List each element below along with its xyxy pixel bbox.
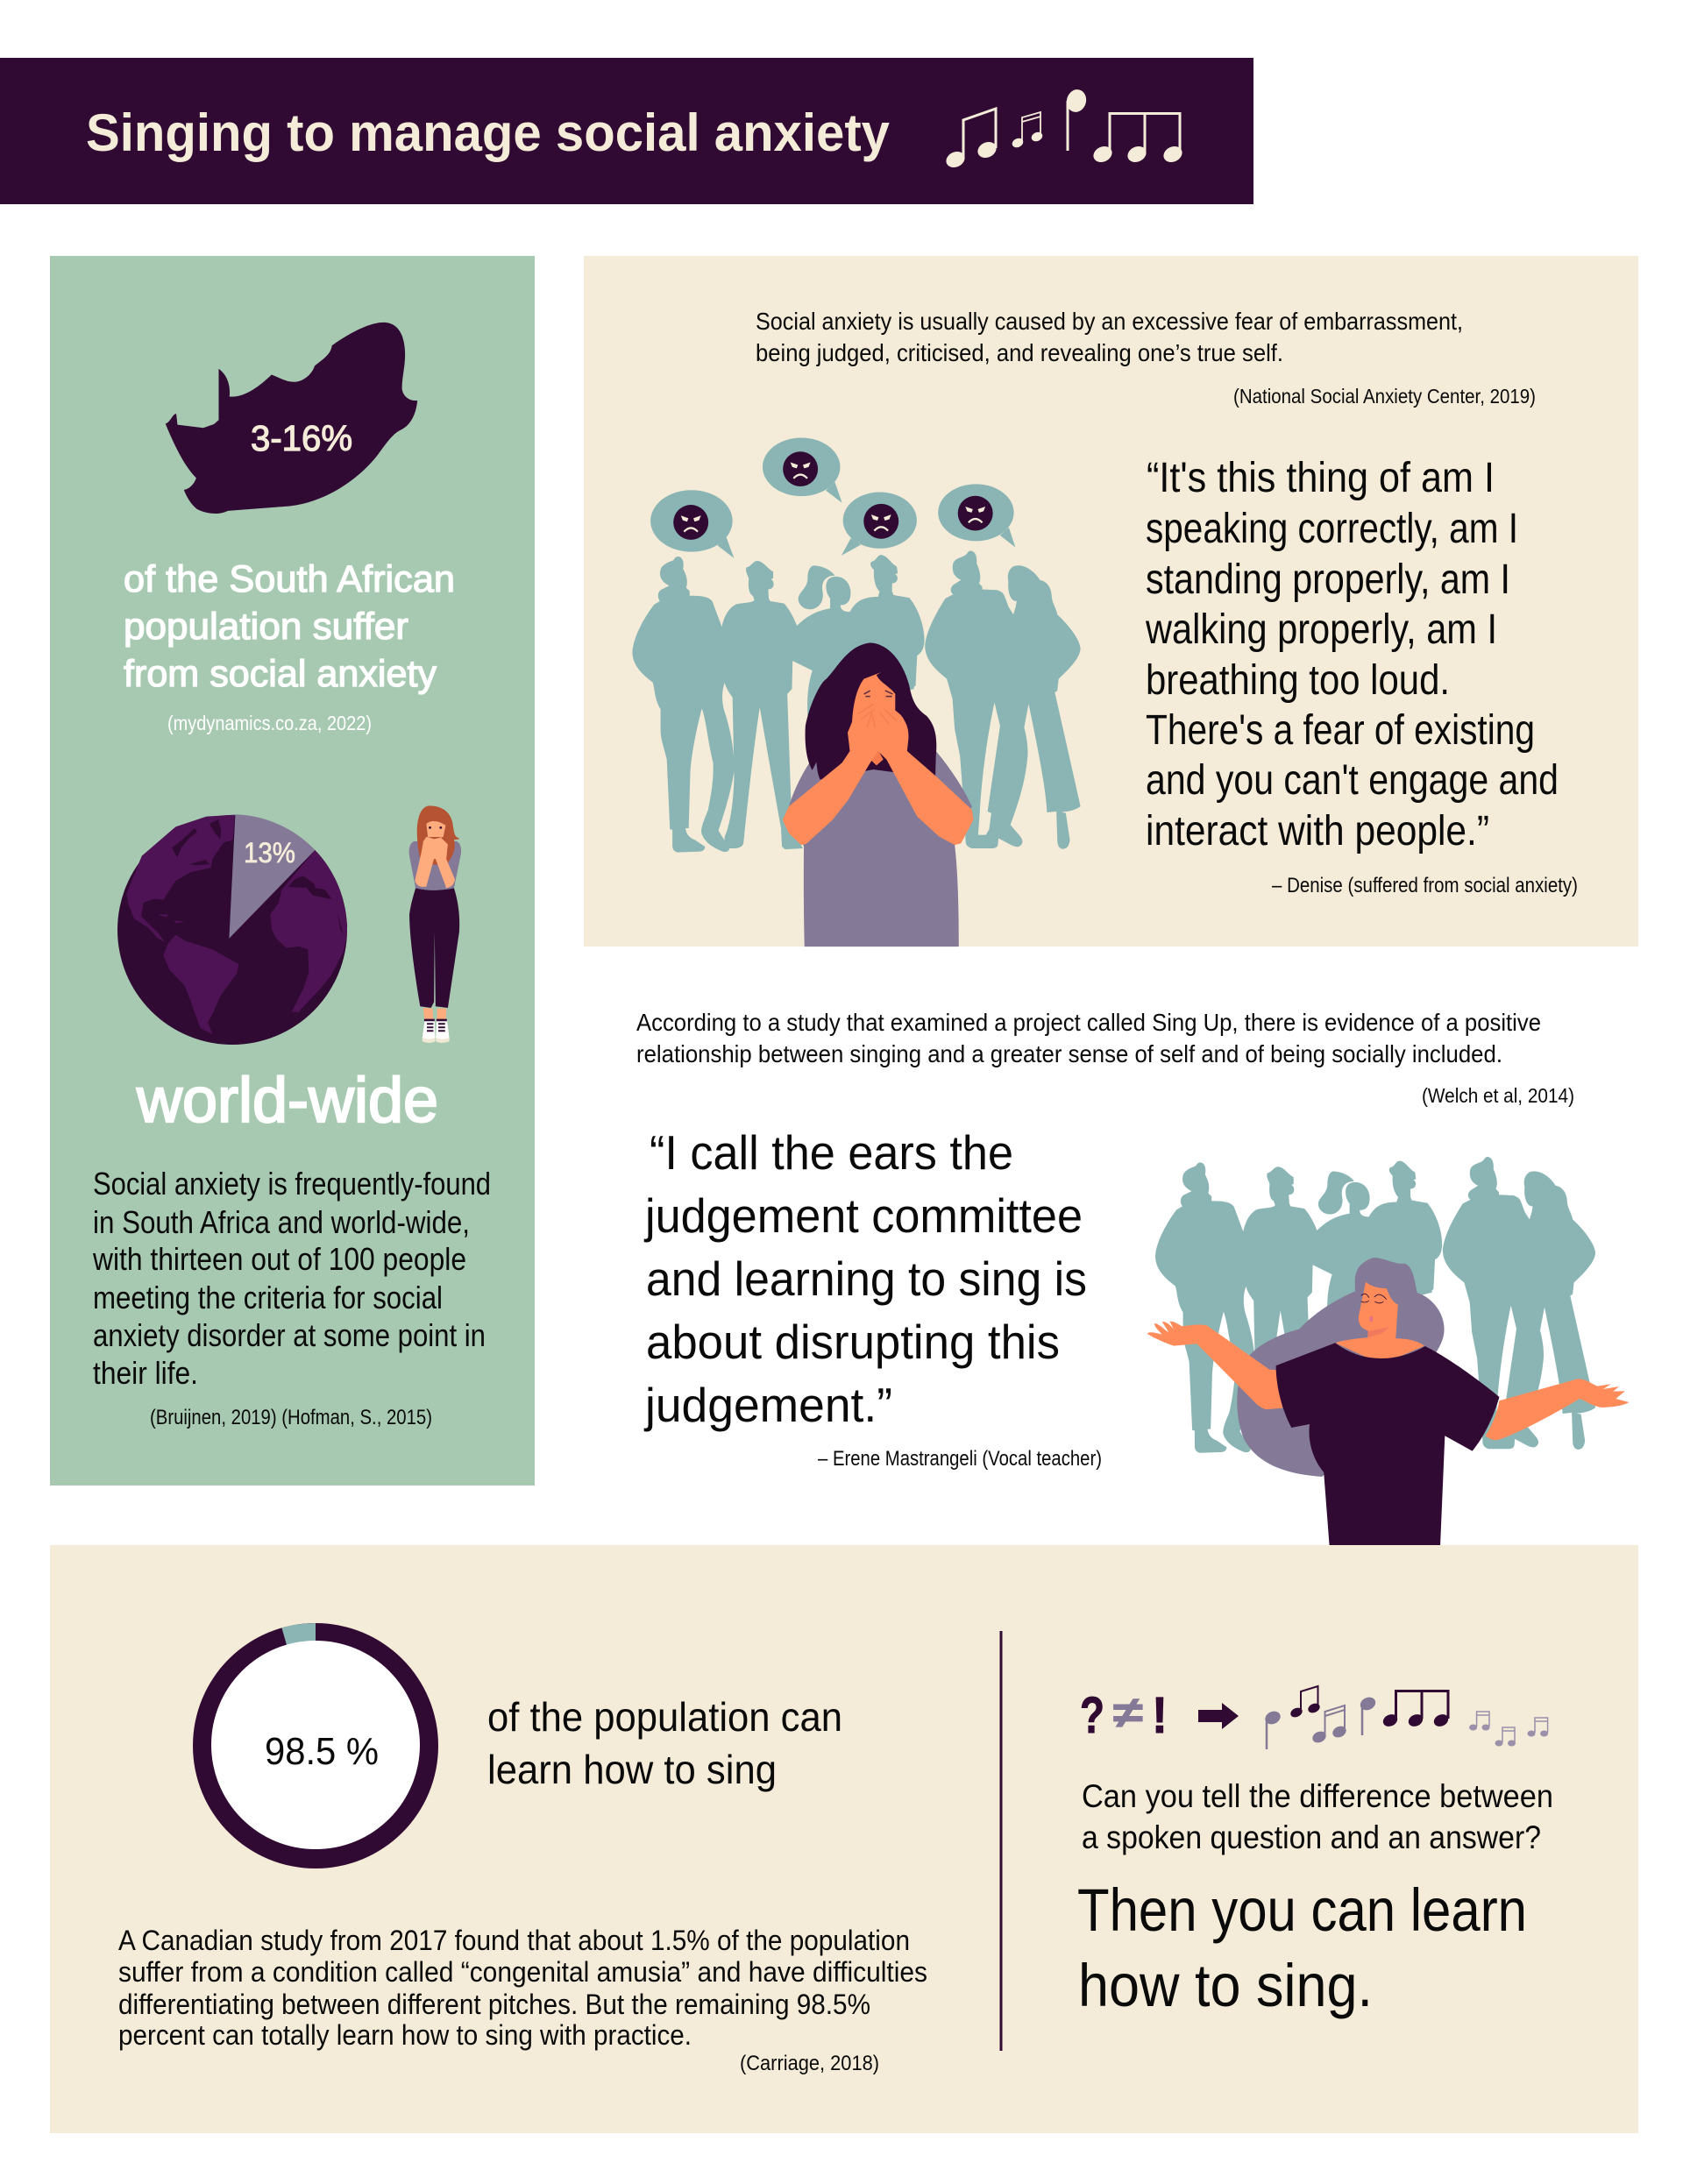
South Africa caption: population suffer <box>124 606 408 648</box>
Sing Up text <box>636 1009 1541 1067</box>
13% wedge <box>229 814 315 939</box>
illustration: judged woman and crowd <box>632 438 1081 947</box>
first quote: breathing too loud. <box>1146 657 1450 704</box>
conclusion text: how to sing. <box>1078 1952 1373 2019</box>
world statistics paragraph: meeting the criteria for social <box>93 1280 443 1315</box>
first quote attribution: – Denise (suffered from social anxiety) <box>1272 874 1578 897</box>
world statistics paragraph: in South Africa and world-wide, <box>93 1204 470 1240</box>
small standing woman <box>409 805 461 1043</box>
illustration: crowd behind second group <box>1155 1157 1595 1453</box>
South Africa caption: from social anxiety <box>124 653 437 695</box>
causes text <box>756 308 1463 366</box>
panel: learning to sing <box>50 1545 1638 2133</box>
panel: South Africa and world statistics <box>50 256 535 1486</box>
panel: causes and first quote <box>584 256 1638 947</box>
South Africa percentage: 3-16% <box>251 418 352 458</box>
world statistics paragraph: Social anxiety is frequently-found <box>93 1166 491 1202</box>
world statistics paragraph: with thirteen out of 100 people <box>92 1241 466 1277</box>
globe pie chart <box>117 814 347 1045</box>
amusia paragraph <box>118 1925 927 2051</box>
world-wide heading: world-wide <box>136 1066 438 1136</box>
second quote: about disrupting this <box>646 1315 1060 1369</box>
South Africa caption <box>124 558 455 695</box>
world statistics paragraph <box>92 1166 491 1391</box>
amusia paragraph: A Canadian study from 2017 found that about 1.5% of the population <box>118 1925 910 1956</box>
music notes <box>1263 1686 1548 1749</box>
second quote <box>643 1125 1087 1432</box>
icon row: question not answer leads to notes <box>1080 1686 1548 1749</box>
conclusion text: Then you can learn <box>1077 1876 1527 1944</box>
section: Sing Up study <box>636 1009 1629 1545</box>
speech bubbles with angry faces <box>650 438 1015 558</box>
first quote: and you can't engage and <box>1146 757 1559 804</box>
second quote: judgement committee <box>643 1188 1083 1243</box>
question text: Can you tell the difference between <box>1082 1778 1553 1814</box>
second quote: judgement.” <box>643 1378 892 1432</box>
amusia paragraph: differentiating between different pitches. But the remaining 98.5% <box>118 1989 870 2020</box>
illustration: singing woman <box>1147 1258 1629 1545</box>
donut caption: learn how to sing <box>487 1747 777 1792</box>
icon row: question not answer leads to notes: ≠ <box>1113 1688 1143 1737</box>
Sing Up text: relationship between singing and a greater sense of self and of being socially included. <box>636 1040 1502 1067</box>
vertical divider <box>999 1631 1003 2051</box>
second quote: and learning to sing is <box>646 1252 1087 1306</box>
world statistics paragraph: anxiety disorder at some point in <box>93 1317 486 1353</box>
Sing Up text: According to a study that examined a project called Sing Up, there is evidence of a positive <box>636 1009 1541 1036</box>
arrow <box>1198 1703 1239 1729</box>
central woman covering mouth <box>783 642 974 947</box>
amusia paragraph: suffer from a condition called “congenital amusia” and have difficulties <box>118 1956 927 1988</box>
second quote: “I call the ears the <box>650 1125 1013 1180</box>
Sing Up citation: (Welch et al, 2014) <box>1422 1084 1574 1107</box>
first quote: walking properly, am I <box>1145 606 1497 653</box>
causes text: being judged, criticised, and revealing one’s true self. <box>756 339 1283 366</box>
13% label: 13% <box>244 837 295 869</box>
first quote <box>1145 455 1559 854</box>
donut chart <box>193 1623 438 1868</box>
causes text: Social anxiety is usually caused by an excessive fear of embarrassment, <box>756 308 1463 335</box>
question text: a spoken question and an answer? <box>1082 1819 1541 1855</box>
causes citation: (National Social Anxiety Center, 2019) <box>1233 385 1536 408</box>
first quote: standing properly, am I <box>1146 557 1510 603</box>
first quote: There's a fear of existing <box>1146 707 1535 754</box>
icon row: question not answer leads to notes: ? <box>1080 1687 1104 1744</box>
donut value: 98.5 % <box>265 1730 379 1773</box>
title banner <box>0 58 1253 204</box>
amusia citation: (Carriage, 2018) <box>740 2052 879 2075</box>
title: Singing to manage social anxiety <box>86 103 891 162</box>
donut caption <box>487 1694 842 1792</box>
first quote: speaking correctly, am I <box>1146 506 1518 552</box>
donut caption: of the population can <box>487 1694 842 1740</box>
conclusion text <box>1077 1876 1527 2019</box>
amusia paragraph: percent can totally learn how to sing with practice. <box>118 2019 692 2051</box>
icon: music notes in banner <box>943 88 1185 170</box>
icon row: question not answer leads to notes: ! <box>1152 1687 1168 1744</box>
South Africa citation: (mydynamics.co.za, 2022) <box>167 712 372 734</box>
map of South Africa <box>166 323 417 514</box>
world statistics citation: (Bruijnen, 2019) (Hofman, S., 2015) <box>150 1406 432 1429</box>
second quote attribution: – Erene Mastrangeli (Vocal teacher) <box>818 1447 1102 1471</box>
first quote: “It's this thing of am I <box>1147 455 1495 501</box>
South Africa caption: of the South African <box>124 558 455 600</box>
world statistics paragraph: their life. <box>93 1355 198 1391</box>
question text <box>1082 1778 1553 1855</box>
first quote: interact with people.” <box>1146 808 1489 854</box>
